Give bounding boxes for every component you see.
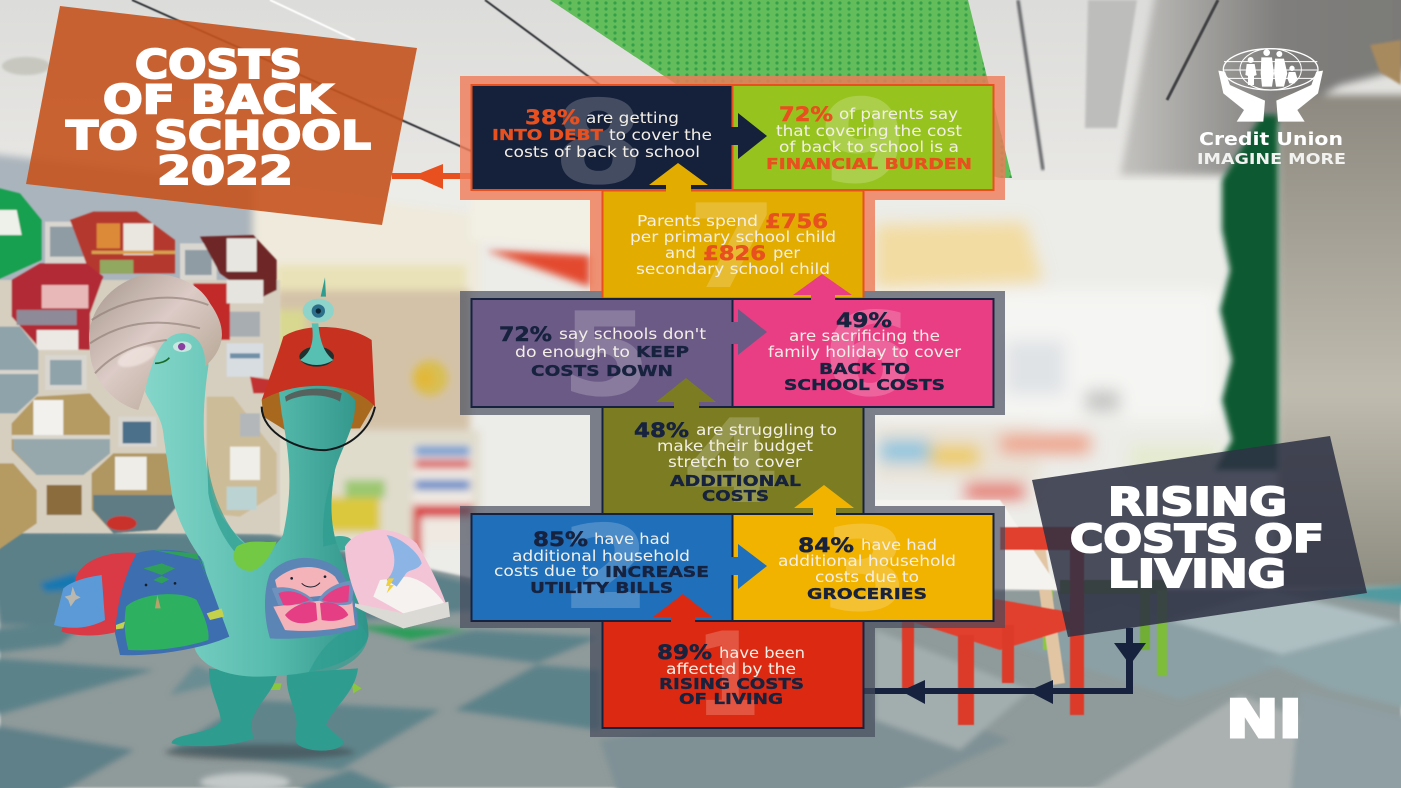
box 4: additional costs bbox=[602, 395, 864, 530]
box 3: groceries: GROCERIES bbox=[807, 585, 927, 603]
box 4: additional costs: COSTS bbox=[702, 487, 769, 505]
box 8: into debt: INTO DEBT bbox=[492, 126, 603, 144]
box 1: rising costs of living: RISING COSTS bbox=[659, 675, 804, 693]
backpack: pink butterfly bbox=[265, 558, 358, 639]
box 3: groceries: additional household bbox=[778, 552, 956, 570]
arrow: box 1 to box 2 bbox=[653, 594, 712, 624]
slime blob bbox=[234, 542, 277, 571]
box 2: utility bills bbox=[472, 501, 732, 636]
box 2: utility bills: INCREASE bbox=[605, 563, 709, 581]
box 5: keep costs down: do enough to bbox=[515, 343, 630, 361]
label: NI: NI bbox=[1226, 690, 1302, 750]
title: costs of back to school 2022 bbox=[66, 43, 371, 194]
eye stalk bbox=[303, 277, 334, 323]
box 8: into debt: 8 bbox=[553, 76, 644, 211]
arrow: to title panel bbox=[392, 164, 472, 189]
arrow: rising costs connector to box 1 bbox=[863, 628, 1146, 704]
box 7: parents spend bbox=[602, 180, 864, 315]
box 6: back to school costs: are sacrificing the bbox=[789, 327, 940, 345]
red and green chairs bbox=[875, 500, 1167, 725]
box 3: groceries: have had bbox=[861, 536, 937, 554]
heading: rising costs of living bbox=[1070, 480, 1324, 596]
title: costs of back to school 2022: COSTS bbox=[135, 43, 302, 88]
title: costs of back to school 2022: 2022 bbox=[157, 149, 293, 194]
box 1: rising costs of living: 1 bbox=[695, 608, 761, 743]
box 8: into debt: to cover the bbox=[609, 126, 712, 144]
box 7: parents spend: £826 bbox=[703, 242, 766, 265]
arrow: box 3 to box 4 bbox=[794, 485, 854, 516]
arrow: box 8 to box 9 bbox=[730, 113, 767, 159]
box 4: additional costs: make their budget bbox=[657, 437, 813, 455]
box 9: financial burden: FINANCIAL BURDEN bbox=[766, 155, 972, 173]
box 2: utility bills: have had bbox=[594, 530, 670, 548]
box 7: parents spend: £756 bbox=[765, 210, 828, 233]
box 6: back to school costs: 6 bbox=[822, 288, 914, 423]
box 4: additional costs: 4 bbox=[681, 395, 781, 530]
box 9: financial burden bbox=[732, 75, 994, 210]
arms bbox=[197, 536, 353, 578]
heading: rising costs of living: COSTS OF bbox=[1070, 517, 1324, 561]
character: two-headed teal creature with backpacks bbox=[54, 274, 450, 751]
box 6: back to school costs: 49% bbox=[836, 309, 892, 332]
ceiling details bbox=[2, 0, 1401, 178]
left shelves bbox=[0, 187, 280, 553]
box 9: financial burden: of back to school is a bbox=[779, 138, 959, 156]
heading: rising costs of living: LIVING bbox=[1108, 552, 1286, 596]
heading: rising costs of living: RISING bbox=[1108, 480, 1287, 524]
box 4: additional costs: ADDITIONAL bbox=[670, 472, 801, 490]
hopscotch frame: orange halo bbox=[460, 76, 1005, 291]
box 5: keep costs down: COSTS DOWN bbox=[531, 362, 673, 380]
arrow: box 2 to box 3 bbox=[730, 544, 767, 589]
logo: credit union bbox=[1197, 49, 1346, 168]
box 6: back to school costs: family holiday to cover bbox=[768, 343, 962, 361]
box 5: keep costs down: 72% bbox=[499, 323, 552, 346]
box 7: parents spend: secondary school child bbox=[636, 260, 830, 278]
backpack: pink unicorn bbox=[345, 530, 450, 628]
box 9: financial burden: 72% bbox=[779, 103, 833, 126]
arrow: box 6 to box 7 bbox=[793, 274, 852, 301]
box 8: into debt bbox=[472, 76, 732, 211]
box 7: parents spend: and bbox=[665, 244, 696, 262]
box 5: keep costs down: KEEP bbox=[636, 343, 689, 361]
box 2: utility bills: 2 bbox=[561, 501, 651, 636]
arrow: box 5 to box 6 bbox=[730, 309, 767, 355]
panel: title costs of back to school bbox=[26, 6, 417, 225]
box 2: utility bills: costs due to bbox=[494, 562, 599, 580]
box 9: financial burden: of parents say bbox=[839, 105, 958, 123]
box 2: utility bills: additional household bbox=[512, 547, 690, 565]
box 1: rising costs of living: have been bbox=[719, 644, 805, 662]
legs and feet bbox=[172, 668, 362, 751]
hopscotch frame: grey halo bbox=[460, 291, 1005, 737]
box 1: rising costs of living: affected by the bbox=[666, 660, 796, 678]
arrow: box 7 to box 8 bbox=[649, 163, 708, 192]
box 7: parents spend: per bbox=[773, 244, 801, 262]
box 2: utility bills: 85% bbox=[533, 528, 588, 551]
backpack: green dinosaur bbox=[115, 550, 229, 655]
title: costs of back to school 2022: OF BACK bbox=[103, 78, 335, 123]
box 2: utility bills: UTILITY BILLS bbox=[530, 579, 673, 597]
box 6: back to school costs: SCHOOL COSTS bbox=[784, 376, 945, 394]
box 6: back to school costs: BACK TO bbox=[819, 360, 910, 378]
box 4: additional costs: stretch to cover bbox=[668, 453, 803, 471]
box 7: parents spend: 7 bbox=[687, 180, 777, 315]
eye left head bbox=[173, 341, 192, 352]
bucket hat with handle bbox=[262, 323, 375, 450]
turban bbox=[89, 274, 222, 410]
box 3: groceries: 3 bbox=[822, 503, 909, 638]
box 7: parents spend: Parents spend bbox=[637, 212, 758, 230]
box 9: financial burden: that covering the cost bbox=[776, 122, 962, 140]
box 3: groceries: costs due to bbox=[815, 568, 919, 586]
logo: credit union: IMAGINE MORE bbox=[1197, 150, 1346, 168]
box 6: back to school costs bbox=[732, 288, 994, 423]
arrow: box 4 to box 5 bbox=[656, 378, 716, 409]
box 4: additional costs: 48% bbox=[634, 419, 689, 442]
box 3: groceries: 84% bbox=[798, 534, 854, 557]
box 5: keep costs down: 5 bbox=[561, 288, 651, 423]
green living wall bbox=[1215, 115, 1278, 470]
bucket interior bbox=[262, 380, 374, 430]
box 1: rising costs of living bbox=[602, 608, 864, 743]
logo: credit union: Credit Union bbox=[1199, 129, 1343, 150]
box 9: financial burden: 9 bbox=[819, 75, 907, 210]
body and necks bbox=[145, 333, 368, 677]
box 5: keep costs down: say schools don't bbox=[559, 325, 706, 343]
box 7: parents spend: per primary school child bbox=[630, 228, 836, 246]
speckled body patch bbox=[207, 447, 368, 677]
title: costs of back to school 2022: TO SCHOOL bbox=[66, 114, 371, 159]
box 8: into debt: are getting bbox=[586, 109, 679, 127]
box 5: keep costs down bbox=[472, 288, 732, 423]
floor bbox=[0, 530, 1401, 788]
panel: rising costs of living bbox=[1032, 436, 1367, 637]
box 4: additional costs: are struggling to bbox=[696, 421, 837, 439]
box 1: rising costs of living: 89% bbox=[657, 641, 712, 664]
right ceiling and wall bbox=[1120, 0, 1401, 590]
box 3: groceries bbox=[732, 503, 994, 638]
icon: globe, family and hands bbox=[1218, 49, 1323, 122]
backpack: red and blue star bbox=[54, 552, 147, 635]
box 8: into debt: 38% bbox=[525, 106, 580, 129]
box 8: into debt: costs of back to school bbox=[504, 143, 700, 161]
box 1: rising costs of living: OF LIVING bbox=[679, 690, 783, 708]
